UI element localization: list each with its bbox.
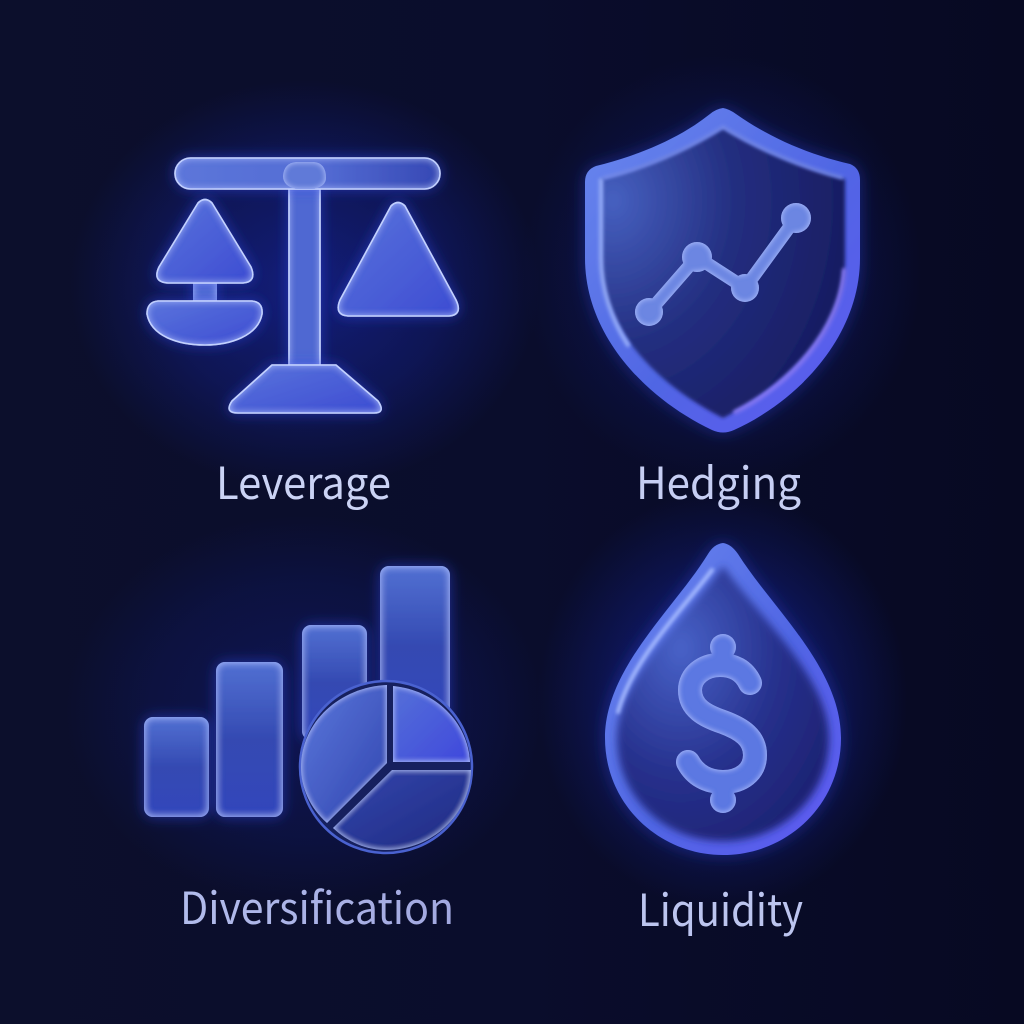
right triangle weight [338,202,458,316]
bar 1 [144,717,209,817]
label: Hedging: Hedging [636,448,801,512]
icon: balance scale (Leverage) [147,158,458,413]
shield top edge light [603,127,843,178]
icon: shield with line chart (Hedging) [585,108,860,432]
drop rim [605,543,841,855]
drop highlight [618,570,712,712]
bar 3 [302,625,367,740]
slice bottom [333,770,471,850]
label: Liquidity: Liquidity [638,875,803,939]
bar 2 [216,662,283,817]
shield lower right light [735,270,844,412]
shield left edge light [601,180,628,345]
pie chart [300,681,472,853]
scale beam [175,158,440,189]
left connector [193,281,217,303]
pie disc [300,681,472,853]
slice left [301,685,387,823]
scale base [229,365,381,413]
label: Leverage: Leverage [216,448,391,512]
icon: water drop with dollar (Liquidity) [605,543,841,855]
bar 4 [380,566,450,726]
scale pivot [283,162,326,189]
left triangle weight [157,200,253,283]
drop inner panel [617,566,829,841]
shield inner panel [601,128,845,418]
shield rim [585,108,860,432]
dollar sign [688,634,755,813]
label: Diversification: Diversification [180,873,454,937]
scale post [289,186,320,368]
slice upper right [393,686,470,762]
trend line [635,203,811,326]
left bowl [147,301,262,345]
icon: bars and pie (Diversification) [144,566,472,853]
